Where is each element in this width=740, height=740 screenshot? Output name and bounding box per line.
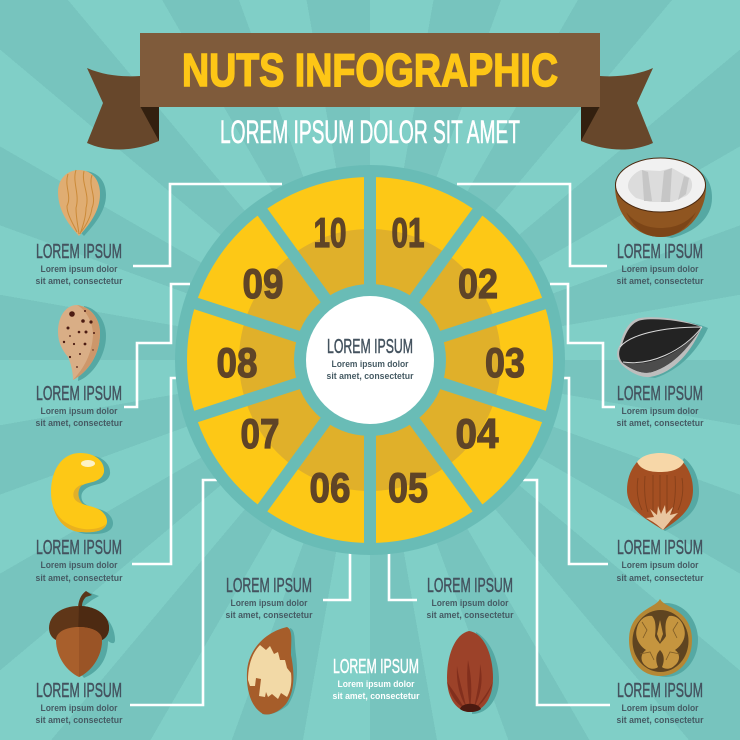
label: item 8: Lorem ipsum dolor <box>622 703 699 714</box>
label: item 1: LOREM IPSUM <box>36 240 122 263</box>
label: bottom left: LOREM IPSUM <box>226 574 312 597</box>
label: bottom center: LOREM IPSUM <box>333 655 419 678</box>
label: bottom left: sit amet, consectetur <box>226 610 313 621</box>
label: item 5: Lorem ipsum dolor <box>622 264 699 275</box>
icon: dark almond <box>447 631 499 714</box>
segment number 02: 02 <box>458 260 498 307</box>
label: bottom center: Lorem ipsum dolor <box>338 679 415 690</box>
label: bottom left <box>226 574 313 621</box>
label: bottom right <box>426 574 514 621</box>
center label: Lorem ipsum dolor <box>332 359 409 370</box>
label: item 8 <box>616 679 704 726</box>
segment number 03: 03 <box>485 339 525 386</box>
label: item 1: Lorem ipsum dolor <box>40 264 118 275</box>
label: item 6: sit amet, consectetur <box>616 418 704 429</box>
label: item 3: LOREM IPSUM <box>36 536 122 559</box>
label: item 7 <box>616 536 704 584</box>
segment number 01: 01 <box>392 209 424 256</box>
center label <box>326 335 414 382</box>
label: item 6: Lorem ipsum dolor <box>622 406 699 417</box>
connector lines <box>124 184 615 705</box>
title banner <box>87 33 653 150</box>
center circle <box>306 296 434 424</box>
label: item 1 <box>36 240 123 287</box>
label: bottom center: sit amet, consectetur <box>332 691 420 702</box>
label: bottom center <box>332 655 420 702</box>
center label: LOREM IPSUM <box>327 335 413 358</box>
icon: cashew <box>51 453 113 534</box>
segment number 07: 07 <box>240 410 280 457</box>
label: item 6 <box>616 382 704 429</box>
label: bottom left: Lorem ipsum dolor <box>230 598 308 609</box>
label: item 3 <box>36 536 123 584</box>
label: item 5 <box>616 240 704 287</box>
label: item 3: Lorem ipsum dolor <box>40 560 118 571</box>
label: item 5: sit amet, consectetur <box>616 276 704 287</box>
label: item 2: Lorem ipsum dolor <box>40 406 118 417</box>
label: item 4 <box>36 679 123 726</box>
label: item 2: sit amet, consectetur <box>36 418 123 429</box>
segment number 08: 08 <box>216 339 258 386</box>
label: bottom right: sit amet, consectetur <box>426 610 514 621</box>
subtitle: LOREM IPSUM DOLOR SIT AMET <box>220 114 520 150</box>
label: item 8: sit amet, consectetur <box>616 715 704 726</box>
icon: almond <box>58 170 106 236</box>
icon: brazil nut <box>247 627 297 715</box>
label: bottom right: Lorem ipsum dolor <box>432 598 509 609</box>
icon: walnut <box>629 599 698 677</box>
segment number 09: 09 <box>242 260 284 307</box>
label: item 2: LOREM IPSUM <box>36 382 122 405</box>
icon: spotted almond <box>58 305 106 381</box>
label: item 4: Lorem ipsum dolor <box>40 703 118 714</box>
icon: hazelnut <box>627 453 699 531</box>
label: item 1: sit amet, consectetur <box>36 276 123 287</box>
label: item 4: LOREM IPSUM <box>36 679 122 702</box>
label: item 3: sit amet, consectetur <box>36 573 123 584</box>
label: item 4: sit amet, consectetur <box>36 715 123 726</box>
icon: acorn <box>49 591 115 678</box>
label: item 2 <box>36 382 123 429</box>
segment number 10: 10 <box>314 209 346 256</box>
wheel chart <box>175 165 565 555</box>
segment number 04: 04 <box>456 410 499 457</box>
segment number 06: 06 <box>310 464 350 511</box>
label: item 7: sit amet, consectetur <box>616 573 704 584</box>
center label: sit amet, consectetur <box>326 371 414 382</box>
segment number 05: 05 <box>388 464 428 511</box>
label: item 7: Lorem ipsum dolor <box>622 560 699 571</box>
title: NUTS INFOGRAPHIC <box>182 44 558 96</box>
icon: sunflower seed <box>617 317 708 378</box>
label: bottom right: LOREM IPSUM <box>427 574 513 597</box>
icon: coconut <box>615 158 712 238</box>
